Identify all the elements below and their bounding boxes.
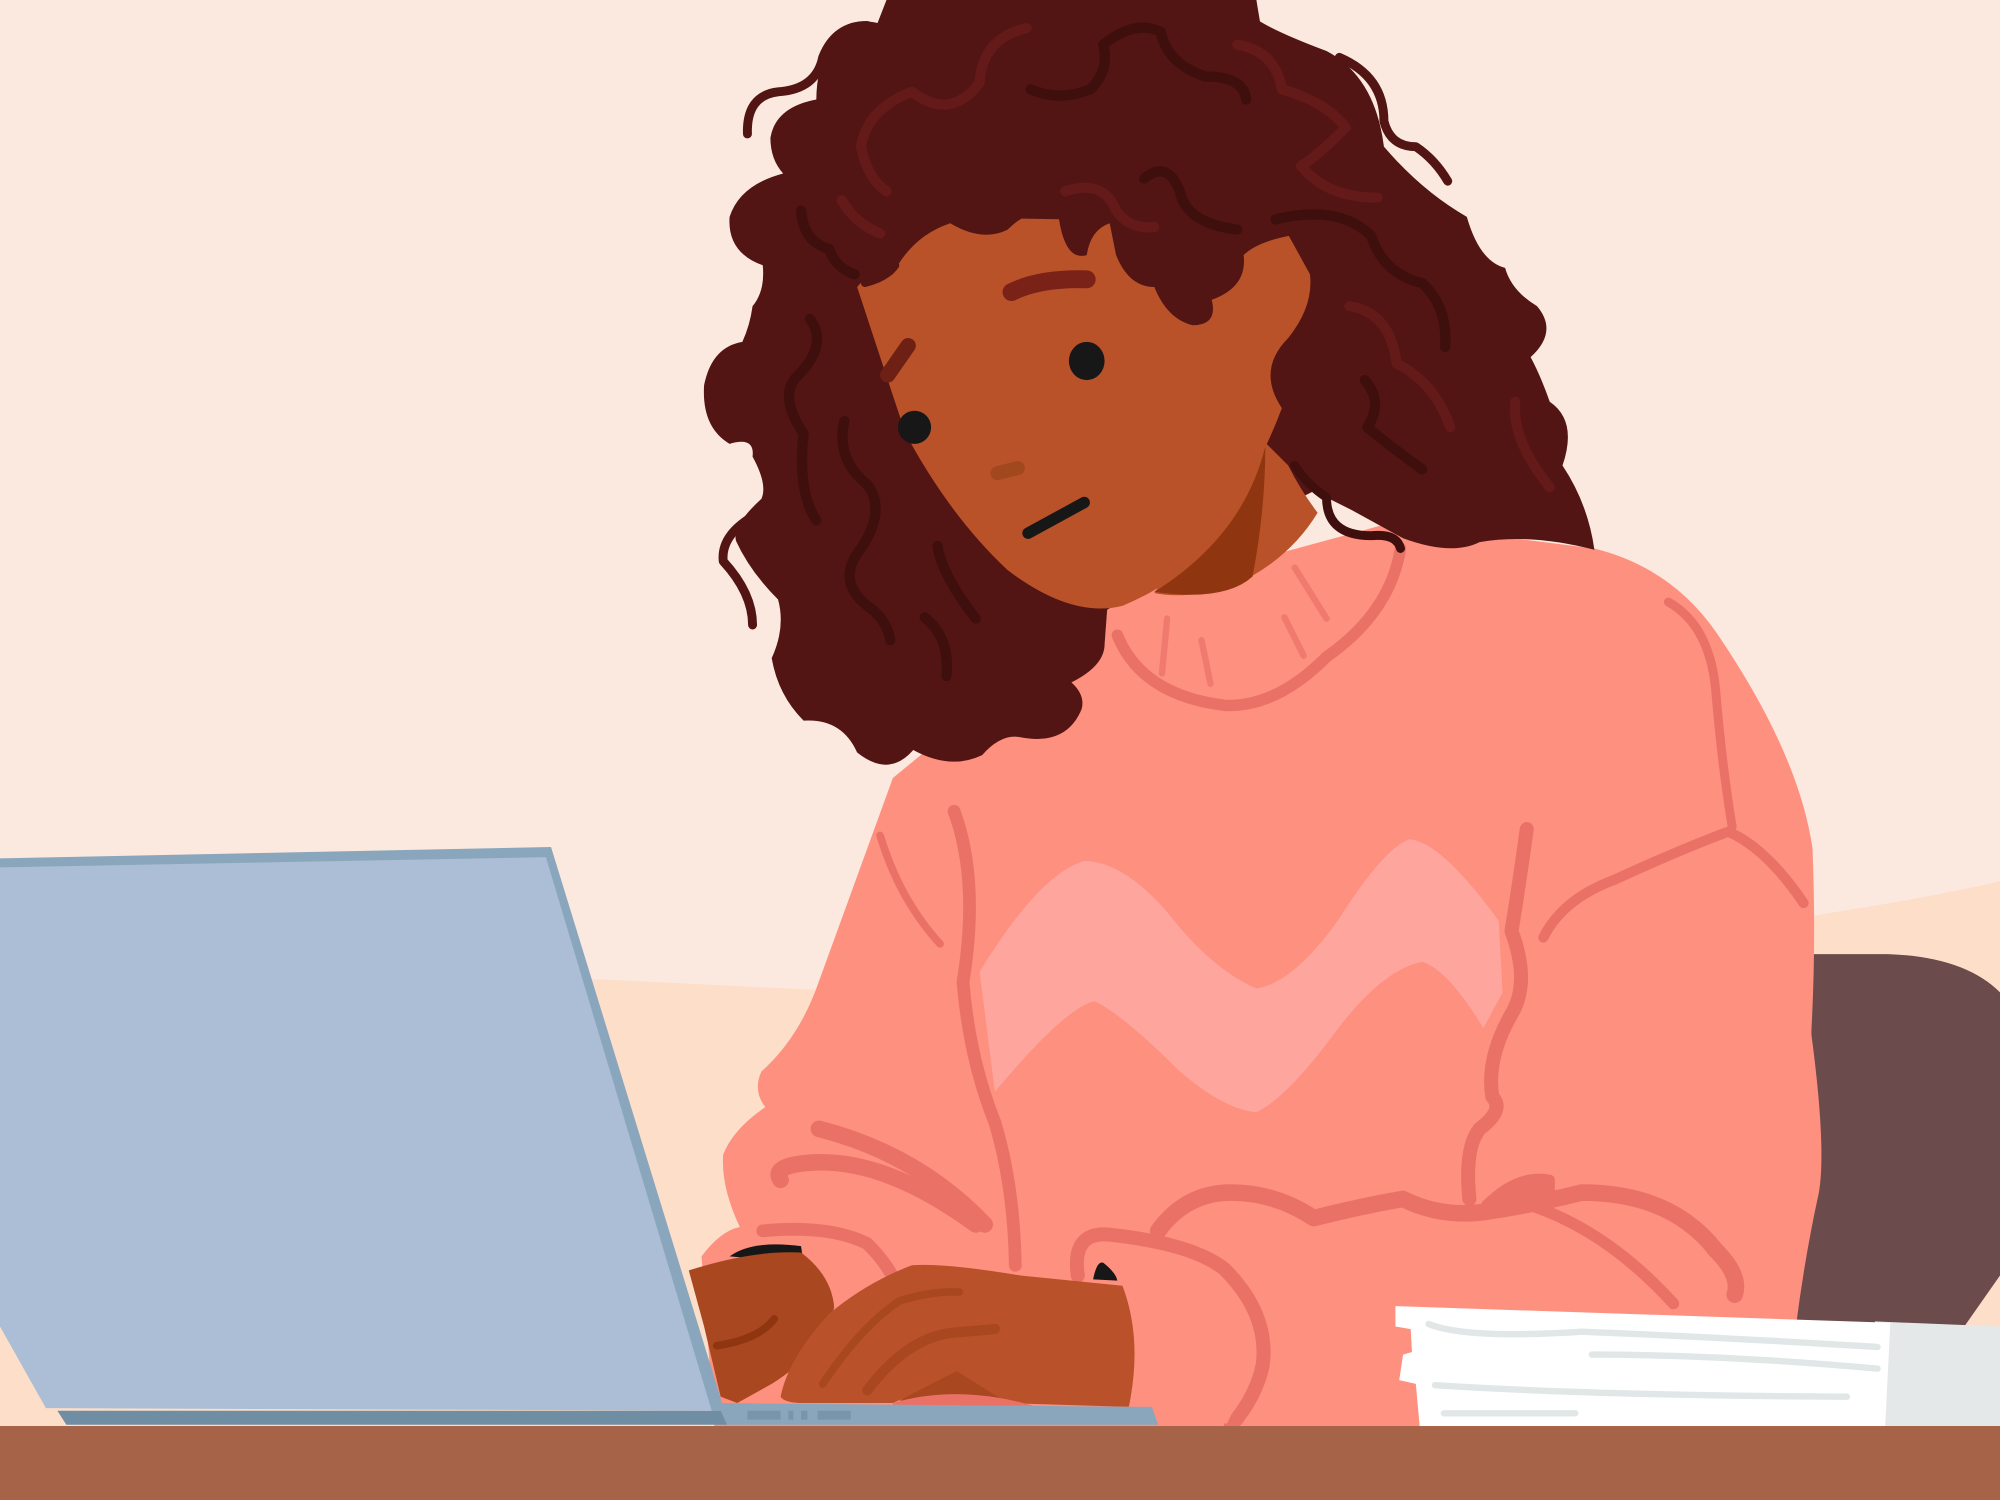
far eyebrow bbox=[888, 346, 908, 375]
nose bbox=[997, 468, 1018, 473]
laptop lid bbox=[0, 857, 712, 1411]
hair bangs bbox=[816, 0, 1314, 325]
sweater body bbox=[702, 523, 1821, 1426]
neck bbox=[1154, 434, 1318, 595]
far eye bbox=[898, 411, 931, 444]
far hand bbox=[689, 1252, 834, 1403]
hair strands: dark bbox=[789, 28, 1445, 676]
hair strand: over face bbox=[865, 265, 895, 283]
sleeve peek under hand bbox=[893, 1394, 1033, 1407]
laptop ports bbox=[747, 1411, 851, 1420]
paper stack front bbox=[1395, 1306, 1890, 1426]
near eyebrow bbox=[1011, 279, 1087, 292]
hair bbox=[704, 0, 1594, 765]
far hand fingernail bbox=[730, 1244, 804, 1263]
cuff bbox=[1097, 1247, 1247, 1423]
table bbox=[0, 1426, 2000, 1500]
laptop base bbox=[712, 1403, 1158, 1425]
neck shadow bbox=[1154, 446, 1265, 595]
chair bbox=[1796, 954, 2000, 1327]
far hand crease bbox=[717, 1319, 774, 1346]
face bbox=[857, 217, 1310, 609]
laptop lid edge bbox=[0, 847, 724, 1411]
sweater zigzag stripe bbox=[980, 839, 1503, 1112]
turtleneck collar bbox=[1117, 548, 1401, 705]
paper stack bbox=[1395, 1306, 2000, 1426]
hair strands: highlights bbox=[842, 28, 1550, 487]
near hand bbox=[781, 1265, 1135, 1407]
near hand creases bbox=[823, 1292, 959, 1384]
sweater folds bbox=[763, 602, 1804, 1426]
near hand fingernail bbox=[1093, 1262, 1117, 1281]
near hand shadow bbox=[899, 1371, 1008, 1403]
hair strands: loose curls bbox=[723, 26, 1448, 625]
laptop bbox=[0, 847, 1158, 1425]
hands on keyboard bbox=[689, 1244, 1247, 1423]
background: peach lower shape bbox=[0, 881, 2000, 1500]
laptop base dark edge bbox=[57, 1411, 727, 1425]
mouth bbox=[1028, 503, 1084, 533]
paper stack side bbox=[1869, 1321, 2000, 1426]
near eye bbox=[1069, 342, 1105, 380]
paper lines bbox=[1429, 1324, 1878, 1413]
sweater bbox=[702, 523, 1821, 1426]
